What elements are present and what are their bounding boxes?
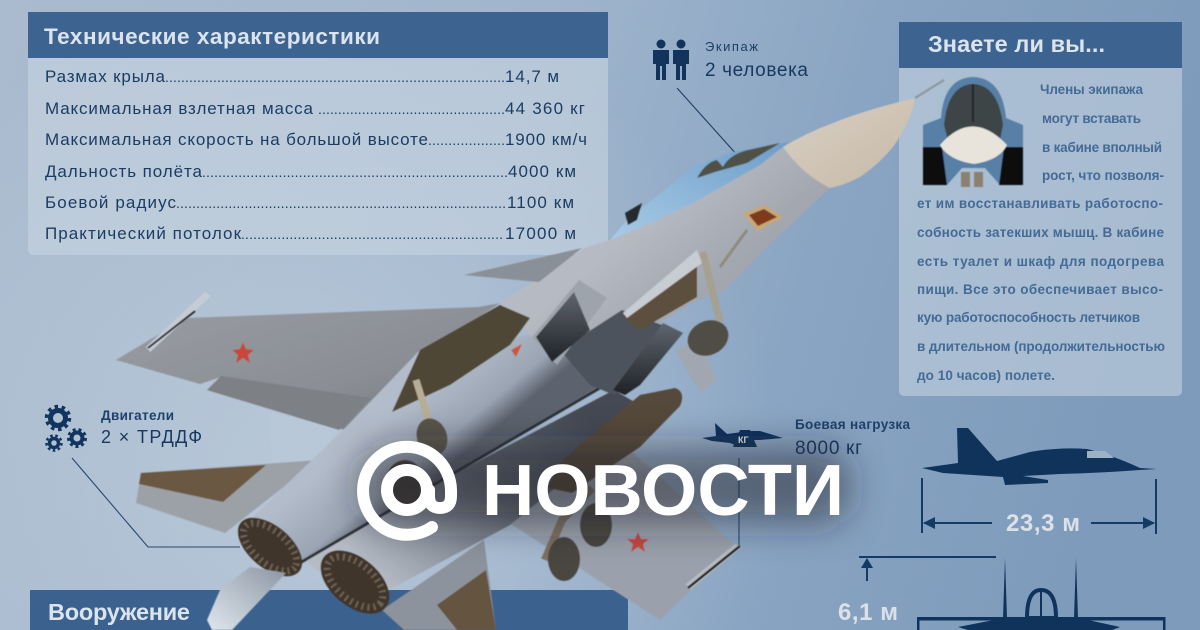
radar cover panel [743, 205, 783, 231]
left canard [464, 248, 582, 282]
heading: did you know: Знаете ли вы... [928, 31, 1105, 57]
callout: crew line [677, 88, 738, 156]
heading: technical specifications: Технические характеристики [44, 24, 380, 49]
crew stat: 2 человека [705, 60, 808, 81]
weapon pod [548, 388, 682, 493]
specification rows [45, 67, 587, 243]
specification rows: 44 360 кг [505, 99, 585, 118]
body text: crew facts: собность затекших мышц. В кабине [917, 225, 1164, 240]
payload stat [702, 417, 910, 459]
logo: dark halo [360, 448, 850, 524]
right landing gear [545, 488, 612, 581]
rear vertical fin [268, 412, 339, 462]
diagram: side silhouette, length 23.3 m [922, 428, 1157, 537]
panel: did you know [899, 22, 1182, 396]
body text: crew facts: ет им восстанавливать работоспо- [917, 196, 1163, 211]
right wing [500, 450, 742, 620]
front silhouette [917, 558, 1166, 630]
left wing [116, 292, 500, 430]
nacelle 2 [300, 390, 665, 590]
intake right [613, 323, 683, 395]
icon: cockpit front view [923, 77, 1023, 187]
left horizontal tail [136, 460, 318, 533]
callout: engines line [72, 458, 240, 547]
diagram: front silhouette, height 6.1 m [838, 557, 1166, 630]
dark area between intakes [560, 310, 683, 395]
logo: @ mark [363, 447, 451, 535]
right horizontal tail [382, 540, 496, 630]
specification rows: Размах крыла [45, 67, 166, 86]
specification rows: Максимальная скорость на большой высоте [45, 130, 428, 149]
specification rows: 14,7 м [505, 67, 559, 86]
body text: crew facts: до 10 часов) полете. [917, 368, 1055, 383]
crew stat: Экипаж [705, 39, 758, 54]
specification rows: ............................................... [318, 101, 505, 117]
specification rows: Боевой радиус [45, 193, 176, 212]
panel: armament header [30, 590, 628, 630]
specification rows: ................................................................. [241, 226, 503, 242]
crew stat [653, 39, 808, 81]
body text: crew facts: рост, что позволя- [1042, 168, 1164, 183]
icon: plane with weight: КГ [738, 435, 749, 445]
specification rows: 1100 км [507, 193, 574, 212]
heading: did you know [899, 22, 1182, 68]
callout: payload line [738, 458, 740, 545]
engines stat: 2 × ТРДДФ [101, 427, 202, 447]
body text: crew facts: Члены экипажа [1040, 82, 1143, 97]
icon: gears [46, 406, 86, 450]
specification rows: 4000 км [508, 162, 576, 181]
left landing gear [385, 380, 453, 508]
panel: technical specifications [28, 12, 608, 255]
intake marking [511, 344, 522, 357]
slot between nacelles [286, 382, 610, 571]
engines stat: Двигатели [101, 408, 174, 423]
nozzles [227, 506, 401, 626]
payload stat: Боевая нагрузка [795, 417, 910, 432]
under-nose fin [675, 340, 717, 392]
tail boom [207, 567, 286, 630]
canopy [610, 142, 790, 240]
body text: crew facts: в длительном (продолжительностью [917, 339, 1165, 354]
body text: crew facts: есть туалет и шкаф для подогрева [917, 254, 1164, 269]
specification rows: ................... [428, 132, 505, 148]
heading: technical specifications [28, 12, 608, 58]
intake left [532, 280, 607, 365]
body text: crew facts: кую работоспособность летчиков [917, 310, 1140, 325]
body text: crew facts: пищи. Все это обеспечивает высо- [917, 282, 1163, 297]
side silhouette [922, 428, 1157, 485]
body text: crew facts: могут вставать [1042, 111, 1141, 126]
specification rows: .................................................................................. [176, 195, 506, 211]
specification rows: 1900 км/ч [505, 130, 587, 149]
engines stat [46, 406, 202, 450]
pitot probe [915, 80, 944, 98]
payload stat: 8000 кг [795, 438, 862, 459]
specification rows: Практический потолок [45, 224, 242, 243]
nacelle 1 [236, 335, 610, 570]
specification rows: ............................................................................ [202, 164, 508, 180]
specification rows: ..................................................................................... [165, 69, 505, 85]
forward fuselage [500, 147, 830, 355]
specification rows: 17000 м [505, 224, 576, 243]
body text: crew facts [917, 82, 1165, 383]
wheel bay [392, 305, 530, 412]
logo: news wordmark: НОВОСТИ [482, 451, 844, 531]
panel: armament header: Вооружение [48, 599, 190, 625]
icon: two crew members [653, 40, 689, 80]
specification rows: Максимальная взлетная масса [45, 99, 314, 118]
body text: crew facts: в кабине вполный [1042, 140, 1162, 155]
illustration: Su-34 jet [116, 80, 944, 630]
nose radome [783, 98, 915, 188]
icon: plane with weight [702, 423, 783, 447]
diagram: front silhouette, height 6.1 m: 6,1 м [838, 599, 898, 626]
front landing gear [682, 230, 747, 362]
diagram: side silhouette, length 23.3 m: 23,3 м [1006, 510, 1080, 537]
specification rows: Дальность полёта [45, 162, 203, 181]
